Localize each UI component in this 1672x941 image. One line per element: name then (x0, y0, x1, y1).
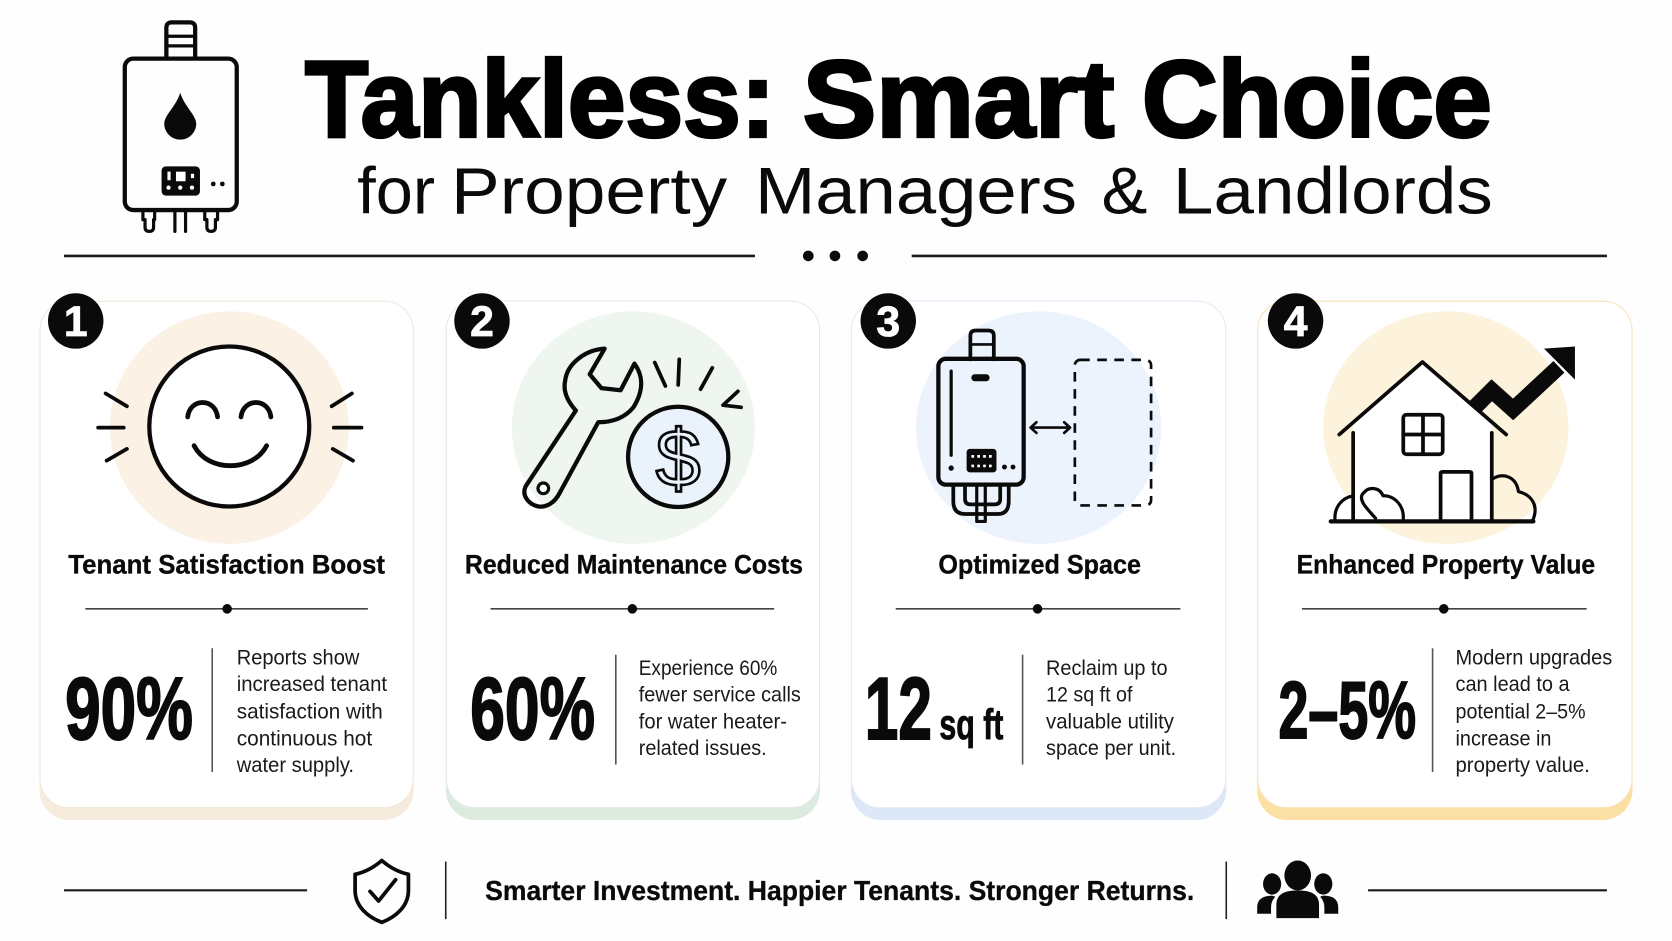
badge 2: 2 (470, 298, 494, 346)
panel: maintenance costs (446, 293, 820, 820)
panel: optimized space (851, 293, 1226, 820)
icon: smiling face (98, 311, 362, 544)
description (236, 645, 387, 777)
title: Choice (1142, 39, 1492, 160)
heading: Tenant Satisfaction Boost (68, 550, 385, 580)
tagline: Smarter Investment. Happier Tenants. Stronger Returns. (485, 875, 1194, 906)
subtitle: for (357, 154, 435, 228)
description (639, 656, 801, 760)
heading: Optimized Space (938, 550, 1141, 580)
description: fewer service calls (639, 683, 801, 707)
badge 1: 1 (64, 298, 88, 346)
description: Modern upgrades (1456, 645, 1612, 669)
subtitle: Property (451, 154, 727, 228)
badge 3 (861, 293, 916, 349)
heading: Reduced Maintenance Costs (465, 550, 803, 580)
description: Reports show (237, 645, 360, 669)
description: increased tenant (237, 672, 387, 696)
description: valuable utility (1046, 709, 1174, 733)
description: property value. (1456, 753, 1590, 777)
description: can lead to a (1456, 672, 1570, 696)
panel: tenant satisfaction (39, 293, 414, 820)
subtitle: Landlords (1173, 154, 1493, 228)
badge 2 (454, 293, 510, 349)
description: water supply. (236, 753, 354, 777)
icon: shield with check (355, 860, 408, 922)
subtitle (357, 154, 1493, 228)
description: satisfaction with (237, 700, 383, 724)
icon: house with rising arrow (1323, 311, 1575, 544)
description: continuous hot (237, 726, 372, 750)
subtitle: & (1102, 154, 1147, 228)
badge 4: 4 (1284, 298, 1308, 346)
description: space per unit. (1046, 736, 1176, 760)
stat: 90% (65, 659, 193, 758)
description (1046, 656, 1176, 760)
description: Experience 60% (639, 656, 777, 680)
stat: 12 (865, 659, 932, 758)
icon: wrench and dollar coin: $ (656, 414, 701, 504)
description: Reclaim up to (1046, 656, 1168, 680)
icon: wrench and dollar coin (512, 311, 755, 544)
description: for water heater- (639, 709, 787, 733)
badge 4 (1268, 293, 1323, 349)
stat: 2–5% (1279, 666, 1416, 756)
description: potential 2–5% (1456, 700, 1586, 724)
description: related issues. (639, 736, 767, 760)
title: Smart (803, 39, 1114, 160)
subtitle: Managers (755, 154, 1077, 228)
description: increase in (1456, 726, 1551, 750)
icon: tankless water heater (125, 22, 237, 231)
title: Tankless: (305, 39, 775, 160)
heading: Enhanced Property Value (1297, 550, 1595, 580)
icon: compact heater and freed space (916, 311, 1161, 544)
badge 1 (48, 293, 103, 349)
description (1456, 645, 1612, 777)
panel: property value (1257, 293, 1633, 820)
badge 3: 3 (876, 298, 900, 346)
description: 12 sq ft of (1046, 683, 1132, 707)
icon: group of people (1257, 860, 1338, 918)
title (305, 39, 1492, 160)
stat: 60% (470, 659, 595, 758)
stat: sq ft (939, 701, 1003, 749)
